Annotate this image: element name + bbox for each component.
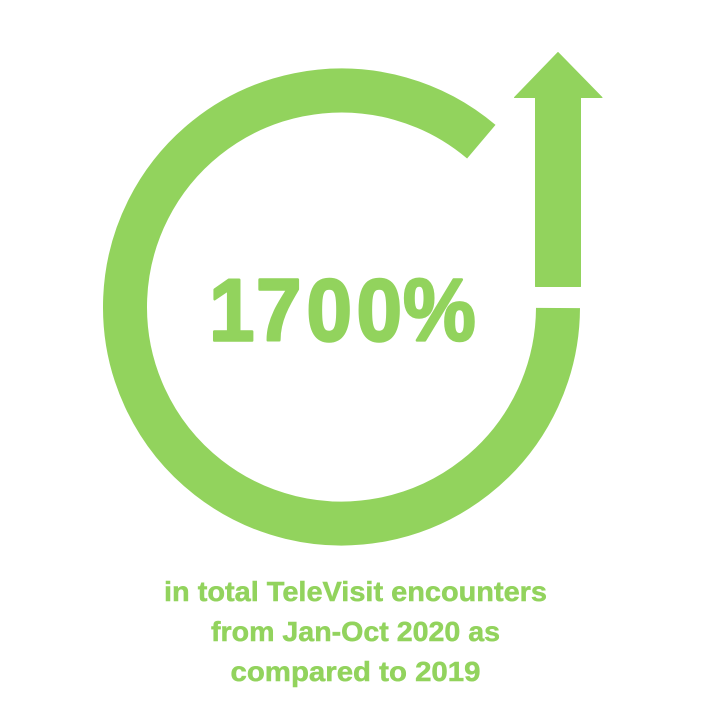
caption [164,576,547,687]
caption line 1: in total TeleVisit encounters [164,576,547,607]
big percentage: 1700% [209,262,476,360]
icon: up arrow [514,52,602,286]
caption line 2: from Jan-Oct 2020 as [211,616,500,647]
icon: circular arc [125,91,558,524]
caption line 3: compared to 2019 [230,656,480,687]
